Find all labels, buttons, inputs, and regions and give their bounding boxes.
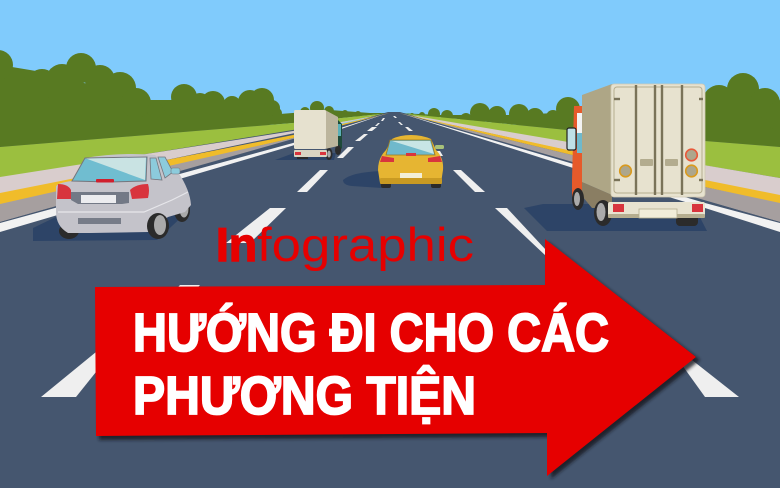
yellow line: right — [398, 113, 780, 203]
yellow car plate — [400, 173, 422, 178]
trees: right — [398, 73, 780, 147]
large truck lights and plate — [613, 204, 624, 212]
yellow car wheels — [381, 178, 391, 188]
small truck cab — [336, 118, 342, 154]
silver car rear window — [72, 157, 147, 182]
yellow line: left — [0, 113, 390, 204]
grass: left — [0, 113, 390, 178]
yellow car shadow — [343, 171, 382, 188]
yellow car mirror — [435, 145, 444, 149]
silver car tail lights — [57, 184, 71, 199]
sky — [0, 0, 780, 125]
white edge line: left — [0, 113, 388, 232]
large truck wheels — [572, 188, 584, 210]
small truck wheels — [335, 145, 341, 155]
large truck handles — [640, 159, 653, 166]
silver car mirror — [171, 168, 180, 174]
sidewalk: left — [0, 113, 390, 195]
small truck — [275, 110, 342, 160]
title — [133, 303, 609, 426]
silver car side windows — [150, 158, 162, 180]
road surface — [0, 112, 780, 488]
sidewalk: right — [398, 113, 780, 197]
title: PHƯƠNG TIỆN — [133, 365, 476, 426]
grass: right — [398, 113, 780, 178]
small truck box side — [325, 110, 338, 149]
large truck rear lamps — [620, 165, 631, 177]
large truck cab — [572, 106, 584, 197]
silver car shadow — [33, 212, 187, 241]
small truck shadow — [275, 153, 336, 160]
silver car trim and plate — [71, 192, 129, 204]
label: Infographic: In — [216, 218, 257, 271]
large truck mirror — [567, 128, 576, 150]
trees: left — [0, 50, 390, 147]
title: HƯỚNG ĐI CHO CÁC — [133, 303, 609, 363]
curb: left — [0, 113, 390, 222]
large truck box side — [582, 84, 612, 195]
large truck door bars — [614, 85, 703, 195]
label: Infographic: fographic — [257, 218, 474, 271]
lane dashes: left — [41, 118, 385, 397]
large truck box rear — [611, 84, 705, 197]
small truck box rear — [294, 110, 326, 149]
silver car body — [56, 154, 191, 233]
red arrow — [95, 239, 696, 476]
yellow car — [343, 135, 444, 188]
yellow car window — [386, 140, 435, 155]
lane dashes: right — [393, 116, 739, 397]
silver car — [33, 154, 191, 241]
large truck bumper — [608, 202, 705, 217]
silver car wheels — [174, 198, 190, 222]
yellow car body — [378, 135, 443, 183]
small truck bumper — [294, 150, 327, 157]
yellow car tail lights — [380, 156, 394, 162]
large truck chassis — [582, 182, 612, 208]
arrow shadow — [98, 242, 700, 479]
silver car front wheel — [147, 213, 169, 239]
white edge line: right — [400, 113, 780, 232]
large truck — [524, 84, 707, 231]
large truck shadow — [524, 204, 707, 231]
curb: right — [398, 113, 780, 222]
silver car brake light — [96, 179, 114, 182]
